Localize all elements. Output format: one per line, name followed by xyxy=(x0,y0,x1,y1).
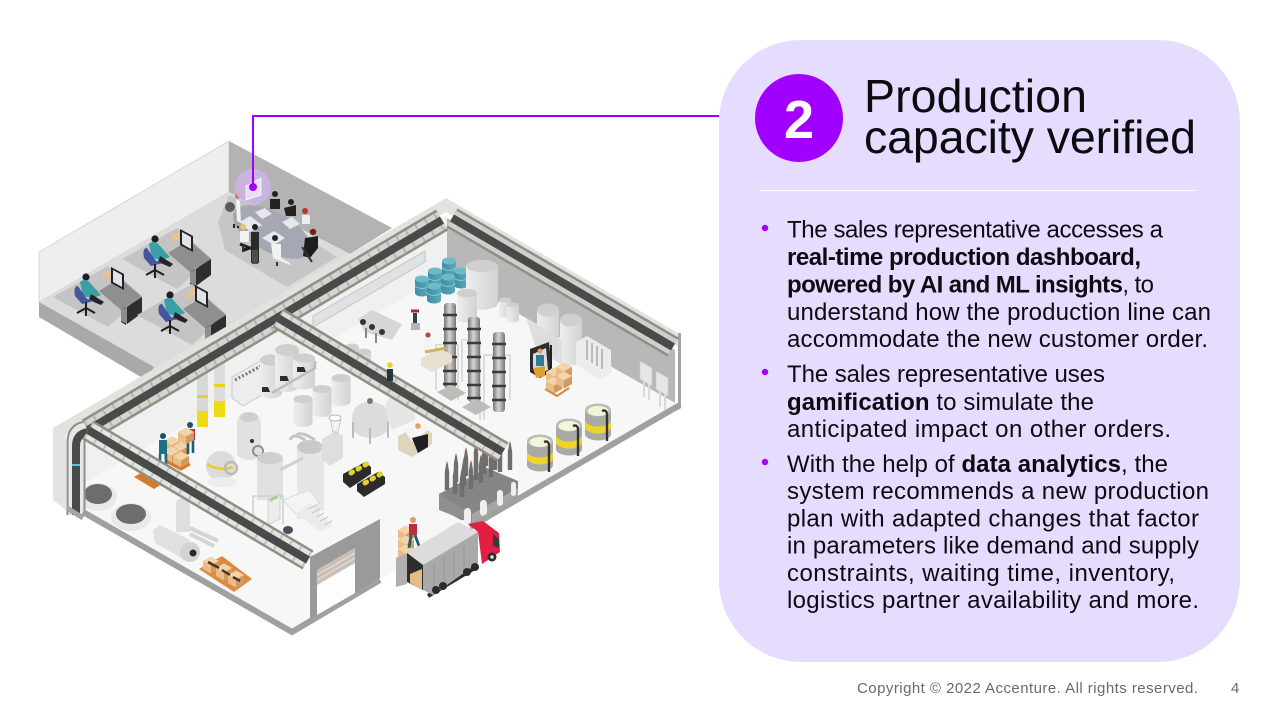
back wall tanks xyxy=(457,260,582,366)
teal drums xyxy=(415,258,468,304)
bullet three: in parameters like demand and supply xyxy=(787,532,1199,560)
bullet two: anticipated impact on other orders. xyxy=(787,416,1171,443)
filter unit xyxy=(322,415,343,466)
factory back walls xyxy=(53,198,681,510)
bullet one: understand how the production line can xyxy=(787,299,1211,326)
pumps and valve xyxy=(358,310,420,343)
bullet one: real-time production dashboard, xyxy=(787,244,1141,271)
bullet one: The sales representative accesses a xyxy=(787,216,1164,244)
workers with pallet xyxy=(134,422,195,489)
distillation towers xyxy=(436,303,510,420)
lab technician xyxy=(421,332,452,372)
rooftop fans xyxy=(79,483,151,531)
page number: 4 xyxy=(1231,680,1239,697)
forklift with boxes xyxy=(530,342,572,396)
bullet three: system recommends a new production xyxy=(787,478,1209,505)
upper-left process tanks and rack xyxy=(232,344,315,406)
office room xyxy=(39,141,392,380)
bullet three: constraints, waiting time, inventory, xyxy=(787,560,1175,587)
factory and office isometric illustration xyxy=(39,141,681,632)
office desks xyxy=(53,228,226,345)
delivery truck xyxy=(396,521,500,596)
bullet one: powered by AI and ML insights, to xyxy=(787,272,1154,298)
connector line xyxy=(253,116,719,187)
black battery blocks xyxy=(343,462,385,497)
bullet three: plan with adapted changes that factor xyxy=(787,506,1199,532)
bullet three: With the help of data analytics, the xyxy=(787,451,1168,478)
conveyor beams xyxy=(72,218,673,560)
step number badge xyxy=(755,74,843,162)
bullet two xyxy=(762,361,1171,443)
bullet two: gamification to simulate the xyxy=(787,389,1094,416)
yellow columns xyxy=(197,362,225,427)
bullet three xyxy=(762,451,1209,614)
boiler vessels xyxy=(206,412,263,487)
electrical cabinets xyxy=(576,336,668,410)
bullet one: accommodate the new customer order. xyxy=(787,326,1208,353)
connector dot xyxy=(249,183,257,191)
delivery worker with boxes xyxy=(398,517,419,562)
hard-hat supervisor xyxy=(387,362,393,381)
panel: production capacity verified xyxy=(719,40,1240,662)
front walls and roller door xyxy=(67,405,680,632)
boxes on pallet xyxy=(199,556,252,592)
step number badge: 2 xyxy=(784,90,814,150)
yellow-lidded storage drums xyxy=(527,404,611,472)
compressor xyxy=(153,498,218,562)
bullet two: The sales representative uses xyxy=(787,361,1105,388)
small cylinders xyxy=(294,344,371,427)
heading: Production xyxy=(864,70,1087,122)
copyright footer: Copyright © 2022 Accenture. All rights reserved. xyxy=(857,680,1198,697)
meeting area xyxy=(218,191,337,287)
bullet one xyxy=(762,216,1211,353)
bullet three: logistics partner availability and more. xyxy=(787,587,1199,614)
presentation board highlight xyxy=(235,169,271,205)
desk engineer xyxy=(398,423,432,457)
factory floor xyxy=(83,273,678,631)
dome reactors xyxy=(352,396,415,444)
heading: capacity verified xyxy=(864,111,1196,163)
main reactor and stairs xyxy=(253,434,333,534)
heading xyxy=(864,70,1196,163)
transformers xyxy=(439,437,518,525)
